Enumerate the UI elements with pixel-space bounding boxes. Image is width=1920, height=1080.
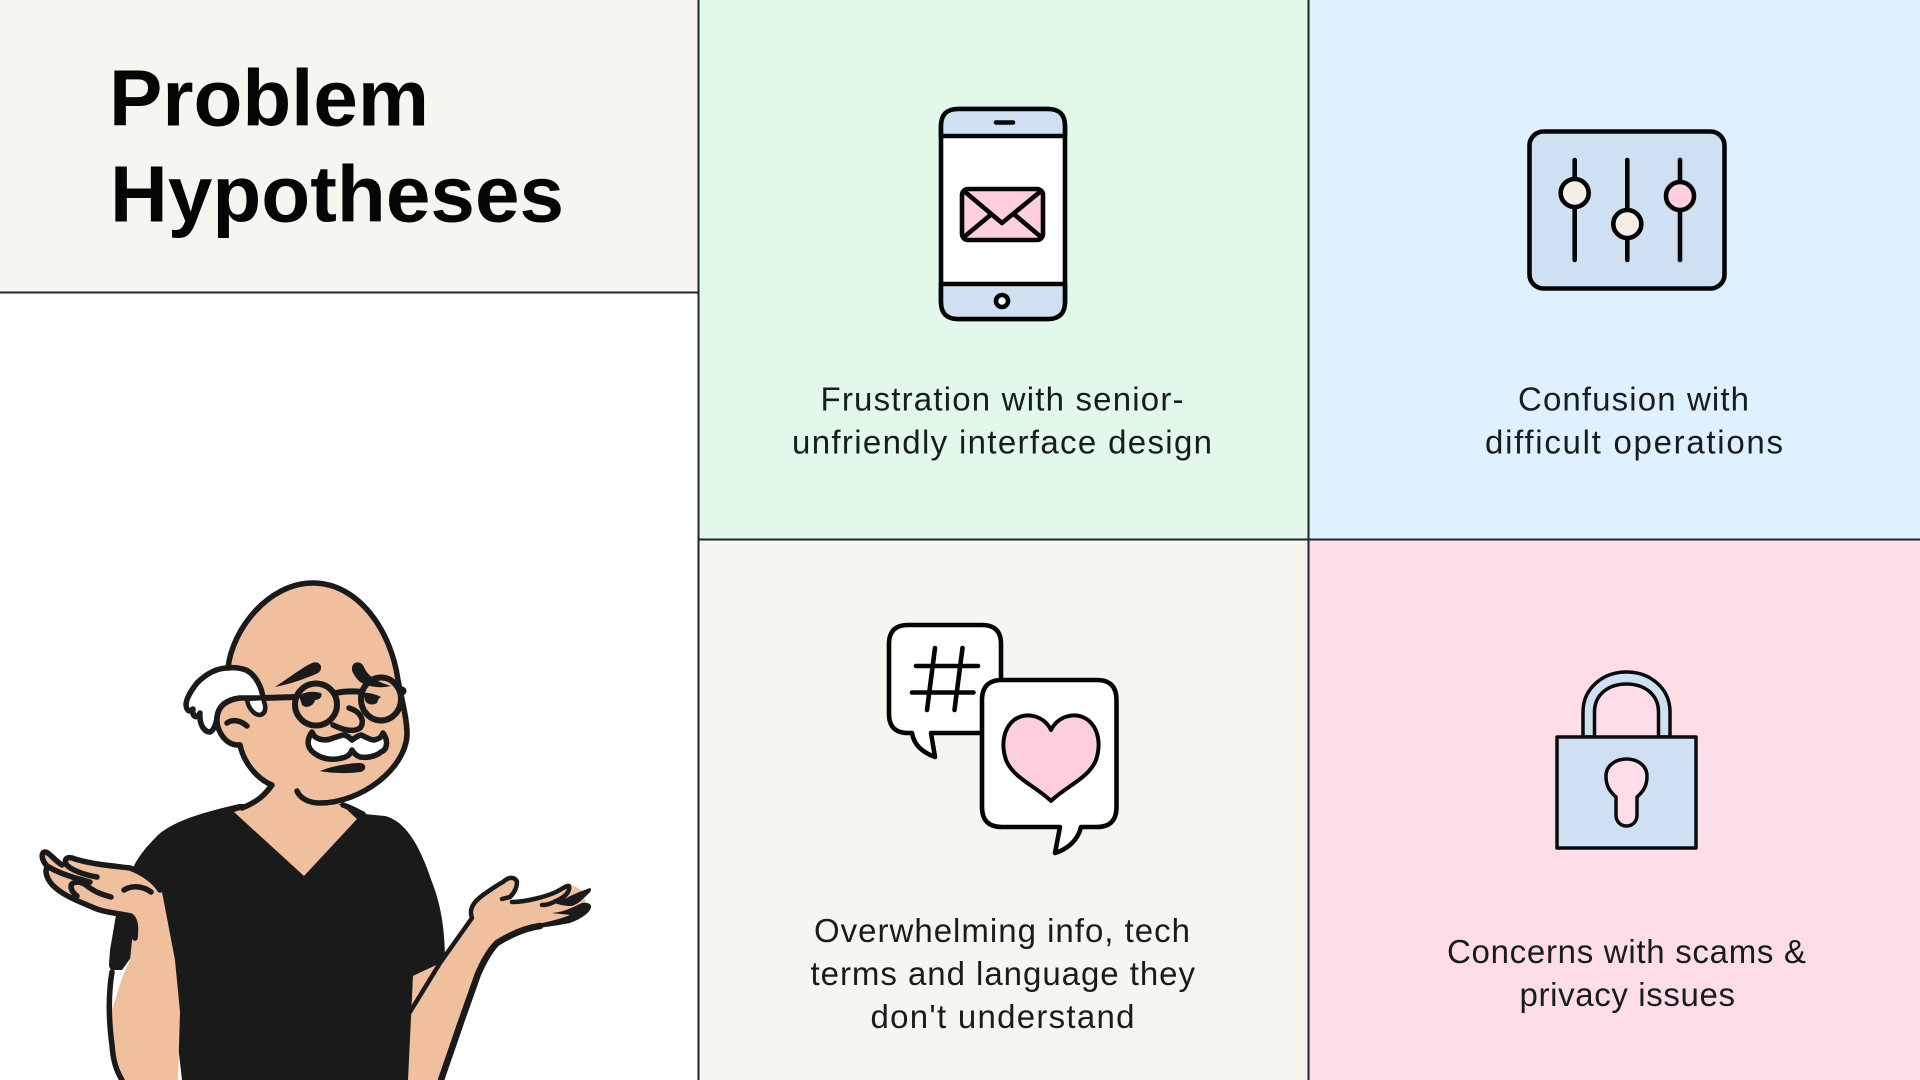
jaw and neck lines (240, 745, 363, 814)
right arm outline (410, 878, 569, 1012)
label: scams and privacy: Concerns with scams & (1447, 933, 1806, 970)
label: difficult operations: Confusion with (1518, 380, 1749, 418)
label: scams and privacy: privacy issues (1520, 976, 1735, 1013)
panel: scams and privacy (1309, 540, 1920, 1080)
label: difficult operations (1485, 380, 1783, 460)
hair tuft (247, 698, 265, 715)
panel: senior-unfriendly design (699, 0, 1308, 539)
label: overwhelming info: Overwhelming info, tech (814, 912, 1190, 949)
right hand lower edge (441, 926, 540, 1080)
illustration: shrugging older man (42, 583, 591, 1080)
right arm and hand (408, 878, 590, 1080)
neck (234, 780, 357, 876)
title: Problem (109, 54, 429, 142)
hair (186, 668, 263, 732)
back sleeve (109, 915, 140, 970)
moustache (308, 732, 387, 759)
head skin (217, 583, 410, 803)
label: difficult operations: difficult operations (1485, 424, 1783, 460)
eyebrows (275, 662, 391, 687)
label: senior-unfriendly design: Frustration with senior- (820, 380, 1184, 418)
nose (333, 708, 362, 730)
head outline (228, 583, 407, 803)
title: Hypotheses (110, 150, 564, 238)
icon: sliders (1530, 132, 1724, 288)
label: overwhelming info (810, 912, 1196, 1035)
ear (217, 698, 247, 745)
panel: title (0, 0, 698, 292)
shirt (132, 804, 445, 1080)
right hand fingers (536, 888, 591, 928)
icon: chat bubbles (889, 625, 1116, 853)
label: overwhelming info: don't understand (870, 998, 1134, 1035)
label: scams and privacy (1447, 933, 1806, 1013)
mouth (320, 763, 365, 773)
icon: phone with envelope (941, 109, 1065, 319)
left arm and hand (44, 852, 180, 1080)
panel: overwhelming info (699, 540, 1308, 1080)
glasses (264, 678, 406, 726)
label: senior-unfriendly design (792, 380, 1212, 460)
label: overwhelming info: terms and language they (810, 955, 1196, 992)
panel: difficult operations (1309, 0, 1920, 539)
icon: padlock (1557, 672, 1696, 848)
left arm outline (42, 852, 160, 1080)
eyes (298, 692, 381, 707)
label: senior-unfriendly design: unfriendly interface design (792, 424, 1212, 460)
